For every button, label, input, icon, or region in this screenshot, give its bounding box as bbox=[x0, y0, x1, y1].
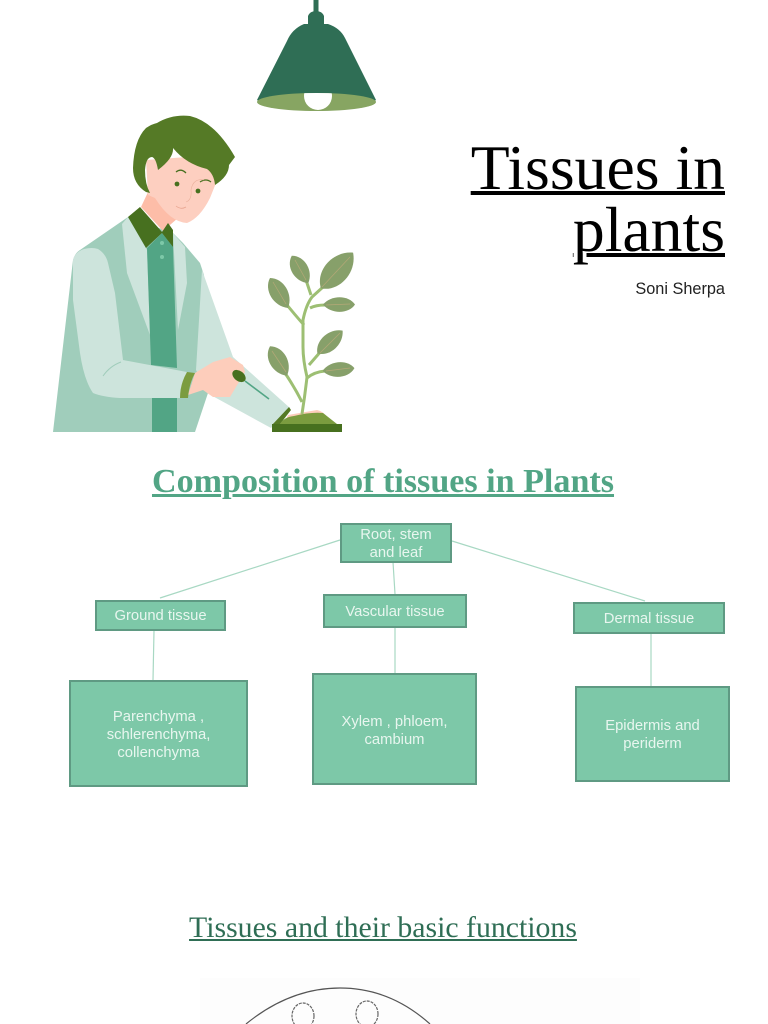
hand bbox=[188, 357, 245, 397]
right sleeve bbox=[196, 270, 290, 428]
left arm bbox=[73, 248, 187, 398]
box: root, stem and leaf: and leaf bbox=[370, 545, 422, 561]
title: plants bbox=[573, 194, 725, 265]
box: ground tissue: Ground tissue bbox=[114, 608, 207, 624]
box: ground tissue types: schlerenchyma, bbox=[107, 726, 210, 742]
eyes and brows bbox=[175, 182, 179, 186]
box: vascular tissue types: Xylem , phloem, bbox=[341, 714, 448, 730]
title: Tissues in bbox=[471, 132, 725, 203]
box: vascular tissue: Vascular tissue bbox=[345, 604, 445, 620]
box: ground tissue types: collenchyma bbox=[117, 744, 200, 760]
neck bbox=[141, 190, 178, 231]
cross-section diagram (cropped) bbox=[200, 978, 640, 1024]
coat body bbox=[53, 217, 208, 432]
dropper bbox=[230, 367, 248, 385]
icon: potted plant bbox=[262, 245, 362, 432]
heading: basic functions: Tissues and their basic functions bbox=[189, 911, 577, 944]
box: vascular tissue bbox=[323, 594, 467, 628]
tree diagram connectors bbox=[153, 540, 651, 686]
box: vascular tissue types bbox=[312, 673, 477, 785]
icon: hanging lamp bbox=[257, 0, 376, 111]
box: dermal tissue: Dermal tissue bbox=[604, 611, 694, 627]
face and ear bbox=[146, 155, 216, 223]
box: vascular tissue types: cambium bbox=[364, 732, 425, 748]
icon: scientist figure bbox=[53, 116, 328, 432]
box: dermal tissue types bbox=[575, 686, 730, 782]
box: root, stem and leaf: Root, stem bbox=[360, 527, 432, 543]
box: dermal tissue types: periderm bbox=[623, 736, 682, 752]
shirt bbox=[147, 233, 177, 368]
collar bbox=[128, 207, 173, 248]
box: dermal tissue types: Epidermis and bbox=[605, 718, 700, 734]
left lapel bbox=[122, 217, 150, 335]
heading: composition: Composition of tissues in Plants bbox=[152, 463, 614, 500]
box: ground tissue bbox=[95, 600, 226, 631]
box: root, stem and leaf bbox=[340, 523, 452, 563]
cuff bbox=[180, 372, 195, 398]
title bbox=[470, 132, 725, 265]
author name: Soni Sherpa bbox=[635, 280, 725, 298]
box: dermal tissue bbox=[573, 602, 725, 634]
right lapel bbox=[173, 233, 187, 330]
hair bbox=[133, 116, 235, 193]
other hand bbox=[285, 410, 328, 422]
coat lower right shade bbox=[177, 368, 197, 432]
box: ground tissue types bbox=[69, 680, 248, 787]
illustration: scientist with lamp and plant bbox=[53, 0, 652, 1024]
box: ground tissue types: Parenchyma , bbox=[113, 708, 204, 724]
